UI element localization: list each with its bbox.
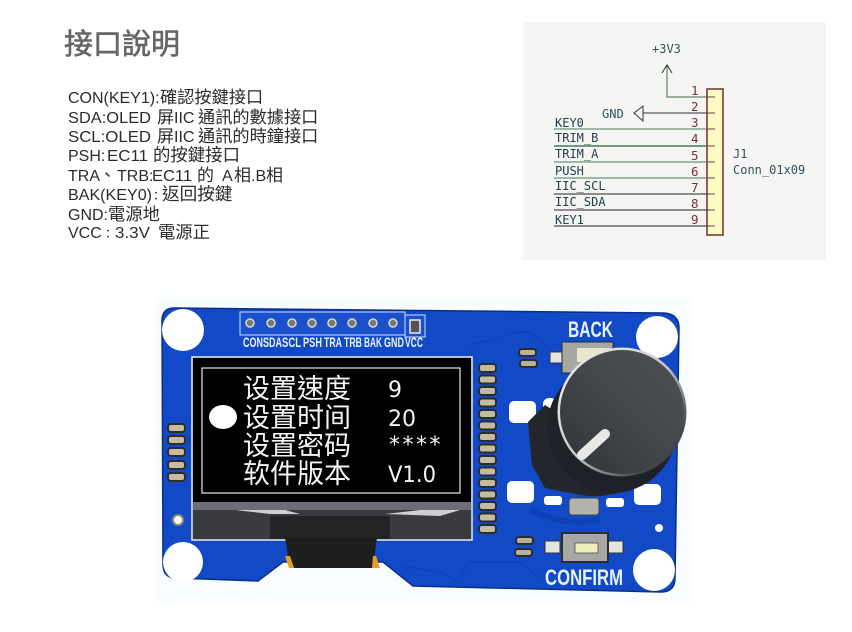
header labels: TRB — [344, 334, 362, 350]
pin numbers: 3 — [691, 115, 699, 130]
pin header — [240, 312, 425, 337]
text block: pin descriptions: .B — [251, 168, 266, 185]
power labels: GND — [602, 107, 624, 121]
text block: pin descriptions: 屏 — [157, 127, 174, 146]
header labels: GND — [384, 334, 404, 350]
net labels: TRIM_B — [555, 131, 598, 145]
OLED module — [192, 357, 472, 540]
photo backdrop — [155, 298, 691, 602]
menu text: 设置密码 — [243, 431, 351, 461]
text block: pin descriptions: SDA:OLED — [68, 110, 151, 127]
CONFIRM label: CONFIRM — [545, 565, 623, 590]
text block: pin descriptions: 電源地 — [108, 204, 160, 224]
header labels: PSH — [303, 334, 322, 350]
text block: pin descriptions: 屏 — [157, 108, 174, 127]
text block: pin descriptions: PSH: — [68, 148, 105, 165]
text block: pin descriptions — [68, 87, 318, 242]
menu values: 20 — [388, 407, 416, 432]
pin numbers: 1 — [691, 83, 699, 98]
text block: pin descriptions: EC11 — [107, 148, 148, 165]
encoder pads — [507, 398, 661, 507]
text block: pin descriptions: 電源正 — [158, 222, 210, 242]
BACK label: BACK — [568, 317, 613, 342]
menu values — [388, 378, 443, 488]
text block: pin descriptions: 返回按鍵 — [162, 184, 232, 204]
connector body — [707, 89, 723, 235]
SMD pairs near buttons — [515, 349, 537, 556]
text block: pin descriptions: BAK(KEY0) — [68, 187, 152, 204]
text block: pin descriptions: IIC — [174, 129, 194, 146]
pin numbers: 4 — [691, 131, 699, 146]
text block: pin descriptions: SCL:OLED — [68, 129, 151, 146]
pin numbers: 5 — [691, 148, 699, 163]
text block: pin descriptions: 通訊的數據接口 — [198, 107, 318, 127]
text block: pin descriptions: ： — [150, 189, 162, 203]
encoder lug — [569, 498, 599, 515]
pin numbers: 7 — [691, 180, 699, 195]
text block: pin descriptions: 、 — [99, 166, 116, 185]
menu values: 9 — [388, 378, 402, 403]
net labels: TRIM_A — [555, 147, 599, 161]
text block: pin descriptions: 相 — [266, 166, 283, 185]
pin numbers — [691, 83, 699, 227]
pin numbers: 8 — [691, 196, 699, 211]
text block: pin descriptions: EC11 — [152, 168, 192, 185]
confirm button — [545, 533, 623, 562]
header labels — [243, 334, 423, 350]
header labels: TRA — [324, 334, 342, 350]
header labels: SDA — [263, 334, 282, 350]
header labels: SCL — [282, 334, 301, 350]
knob — [528, 348, 686, 496]
header labels: CON — [243, 334, 263, 350]
panel: schematic — [523, 22, 826, 260]
text block: pin descriptions: 相 — [234, 166, 251, 185]
text block: pin descriptions: IIC — [174, 110, 194, 127]
menu values: V1.0 — [388, 463, 436, 488]
connector reference: Conn_01x09 — [733, 163, 805, 177]
menu values: **** — [389, 433, 443, 458]
SMD column right — [479, 364, 496, 533]
menu text: 设置速度 — [243, 374, 351, 404]
power labels: +3V3 — [652, 42, 681, 56]
text block: pin descriptions: TRA — [68, 168, 100, 185]
text block: pin descriptions: CON(KEY1): — [68, 90, 160, 107]
pin numbers: 6 — [691, 164, 699, 179]
menu selector — [209, 405, 237, 429]
text block: pin descriptions: TRB: — [117, 168, 153, 185]
text block: pin descriptions: VCC — [68, 225, 102, 242]
net labels — [555, 116, 606, 227]
menu text: 软件版本 — [243, 459, 351, 489]
pin numbers: 9 — [691, 212, 699, 227]
pin numbers: 2 — [691, 99, 699, 114]
net labels: IIC_SCL — [555, 179, 606, 193]
back button — [550, 342, 613, 373]
text block: pin descriptions: 的 — [197, 166, 214, 185]
text block: pin descriptions: 3.3V — [115, 225, 150, 242]
header labels: VCC — [405, 334, 423, 350]
board traces — [400, 332, 600, 584]
net labels: KEY0 — [555, 116, 584, 130]
net labels: IIC_SDA — [555, 195, 606, 209]
text block: pin descriptions: 的按鍵接口 — [153, 145, 240, 165]
net labels: PUSH — [555, 164, 584, 178]
power labels — [602, 42, 681, 121]
photo: OLED module — [155, 298, 691, 602]
text block: pin descriptions: 通訊的時鐘接口 — [198, 126, 318, 146]
text block: pin descriptions: 確認按鍵接口 — [160, 87, 263, 107]
net labels: KEY1 — [555, 213, 584, 227]
menu text: 设置时间 — [243, 403, 351, 433]
title: 接口說明 — [64, 28, 180, 61]
header labels: BAK — [364, 334, 382, 350]
flex cable — [285, 538, 380, 568]
menu text — [243, 374, 351, 489]
connector reference — [733, 147, 805, 177]
text block: pin descriptions: A — [222, 168, 233, 185]
text block: pin descriptions: ： — [102, 227, 114, 241]
board — [162, 308, 679, 592]
connector reference: J1 — [733, 147, 747, 161]
text block: pin descriptions: GND: — [68, 207, 108, 224]
SMD column left — [168, 424, 185, 481]
mounting holes — [162, 309, 678, 591]
wires — [554, 65, 715, 226]
